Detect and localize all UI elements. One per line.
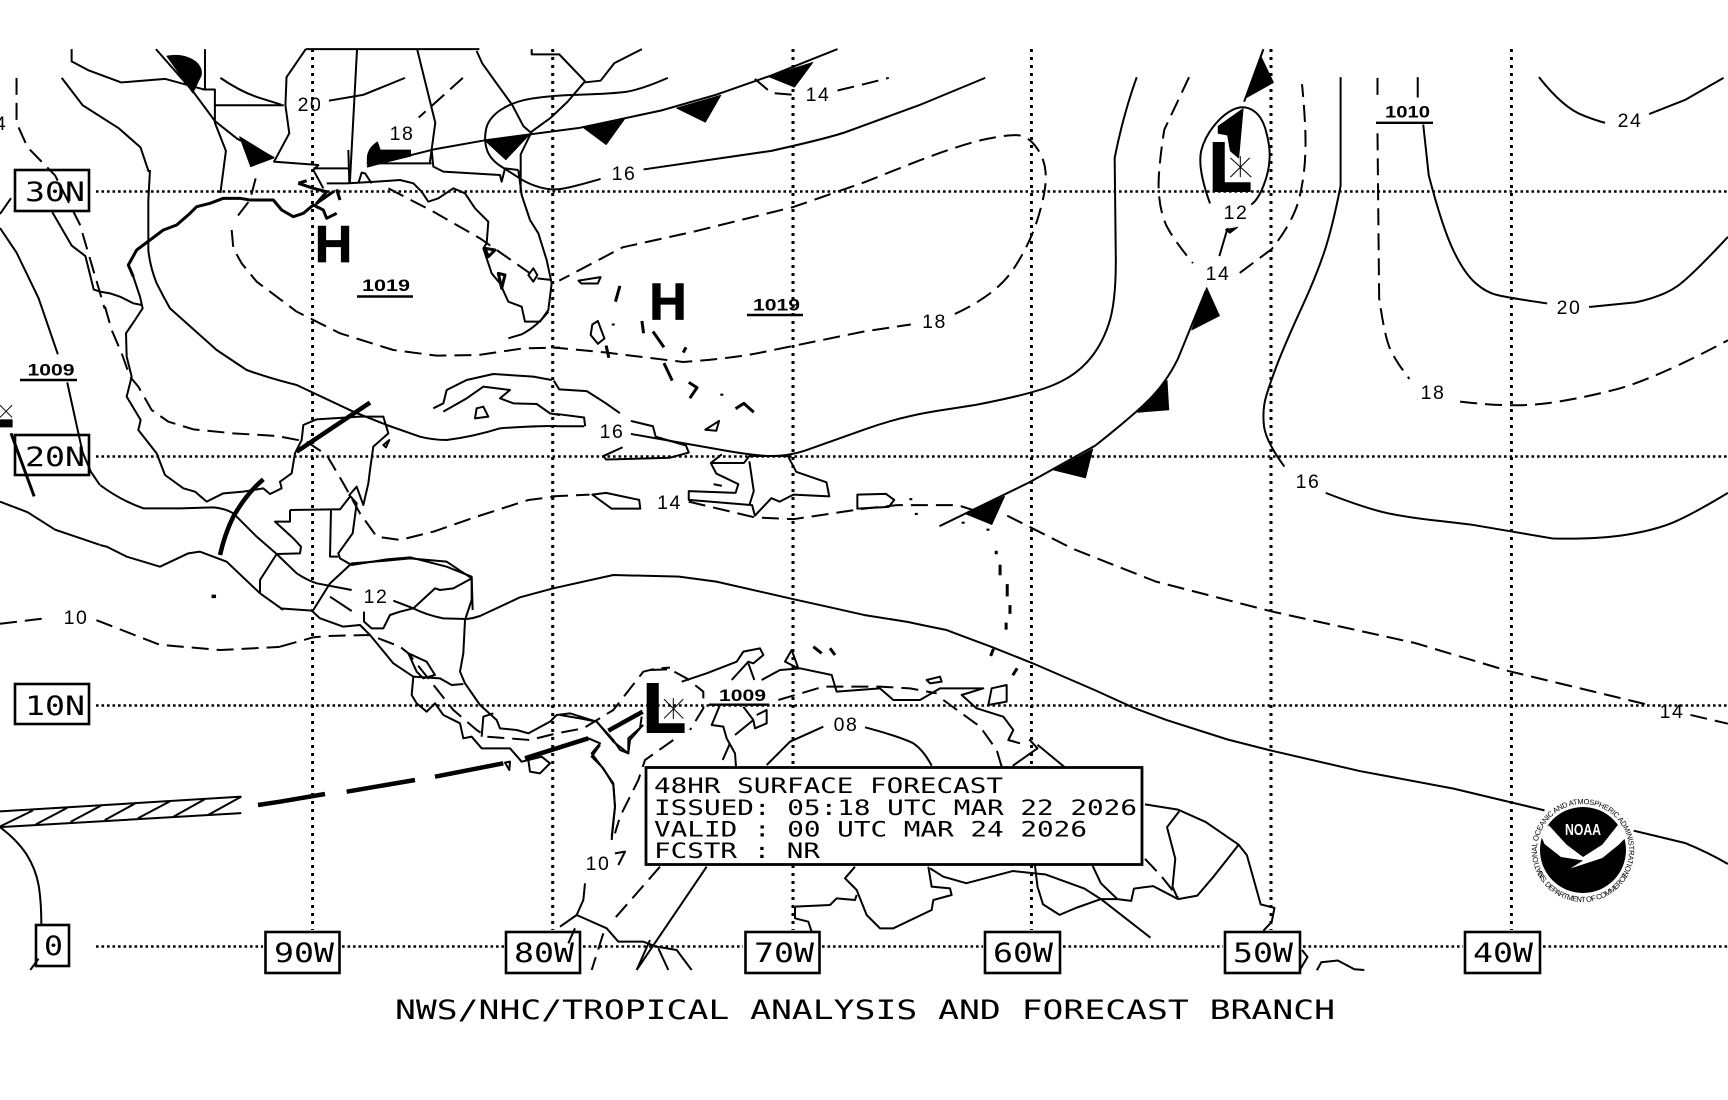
isobar contour labels: 20 [298, 94, 322, 116]
icon: NOAA logo: NOAA [1565, 822, 1601, 839]
pressure value 1019 Bahamas [747, 296, 803, 315]
isobar contour labels: 10 [586, 853, 610, 875]
isobar contour labels: 14 [1206, 263, 1230, 285]
longitude label 40W: 40W [1473, 938, 1534, 969]
isobar 08 contours, northern South America [637, 727, 967, 970]
pressure value 1019 Gulf: 1019 [362, 276, 410, 295]
pressure value 1009 Colombia [709, 686, 769, 705]
isobar contour labels [0, 84, 1684, 875]
coastlines and borders: northern South America [560, 647, 1020, 970]
pressure value 1009 Mexico: 1009 [28, 360, 74, 380]
tropical wave off southern Mexico [11, 433, 214, 598]
pressure value 1019 Bahamas: 1019 [753, 296, 800, 314]
low pressure symbol, Atlantic: L [1209, 128, 1252, 206]
latitude label 0: 0 [44, 931, 63, 962]
tropical wave over Yucatan and Mexico [220, 403, 370, 555]
longitude label 40W [1465, 932, 1540, 973]
isobar contour labels: 12 [364, 586, 388, 608]
latitude label 30N: 30N [25, 177, 85, 208]
pressure value 1009 Colombia: 1009 [719, 686, 766, 705]
high pressure symbol, Gulf of Mexico: H [315, 216, 352, 274]
longitude label 80W [506, 932, 580, 973]
longitude label 90W: 90W [274, 938, 335, 969]
icon: NOAA logo: U.S. DEPARTMENT OF COMMERCE [1538, 872, 1628, 902]
longitude label 90W [266, 932, 340, 973]
isobar contour labels: 18 [922, 311, 947, 333]
longitude label 60W: 60W [993, 938, 1054, 969]
latitude and longitude grid [96, 49, 1728, 946]
longitude label 70W: 70W [754, 938, 815, 969]
isobar contour labels: 08 [834, 714, 858, 736]
longitude label 60W [985, 932, 1060, 973]
isobar contour labels: 16 [1296, 471, 1320, 493]
coastlines and borders: Central America [280, 558, 642, 840]
low pressure centre crosses [0, 156, 1251, 719]
latitude label 30N [15, 170, 89, 211]
isobar contour traced across Central America [393, 575, 680, 619]
longitude label 80W: 80W [514, 938, 575, 969]
latitude label 10N: 10N [25, 691, 85, 722]
latitude label 20N [15, 435, 89, 475]
longitude label 50W [1225, 932, 1300, 973]
isobar contour labels: 16 [600, 421, 624, 443]
isobars: solid contours [0, 77, 1728, 938]
isobars: solid contours traced over Gulf and Central America [100, 170, 557, 590]
forecast information box: VALID : 00 UTC MAR 24 2026 [654, 818, 1087, 842]
latitude label 20N: 20N [25, 442, 85, 473]
footer credit line: NWS/NHC/TROPICAL ANALYSIS AND FORECAST BRANCH [395, 995, 1335, 1026]
forecast information box: ISSUED: 05:18 UTC MAR 22 2026 [654, 796, 1137, 820]
isobar contour labels: 24 [1618, 110, 1642, 132]
isobar contour labels: 18 [390, 123, 414, 145]
latitude label 0 [36, 925, 69, 966]
cold front across the Atlantic with barbs [939, 49, 1273, 526]
pressure value 1019 Gulf [357, 276, 413, 296]
isobar contour labels: 14 [657, 492, 682, 514]
forecast information box [646, 768, 1142, 864]
isobar 10 dashed contour, Central America [280, 635, 670, 740]
pressure value 1009 Mexico [20, 360, 77, 380]
isobar contour labels: 14 [1660, 701, 1684, 723]
longitude label 70W [746, 932, 820, 973]
longitude label 50W: 50W [1233, 938, 1294, 969]
dashed contours around the Colombian low [592, 669, 1002, 970]
pressure value 1010 Atlantic: 1010 [1385, 102, 1430, 122]
stationary front over the southeastern United States [156, 49, 838, 167]
monsoon trough: heavy dashes [258, 712, 643, 805]
coastlines and borders: northern Gulf states and Atlantic [0, 49, 1364, 971]
isobar contour labels: 20 [1557, 297, 1581, 319]
isobars: dashed contours traced over Gulf [105, 178, 560, 540]
isobar contour labels: 12 [1224, 202, 1248, 224]
isobar contour labels: 14 [806, 84, 830, 106]
isobar contour labels: 10 [64, 607, 88, 629]
monsoon trough: hatched band [0, 797, 241, 827]
isobars: dashed contours [0, 77, 1728, 897]
high pressure symbol, Bahamas: H [649, 274, 687, 332]
isobar contour labels: 18 [1421, 382, 1445, 404]
forecast information box: 48HR SURFACE FORECAST [654, 774, 1003, 798]
low pressure symbol, Colombia: L [643, 669, 686, 747]
icon: NOAA logo: NATIONAL OCEANIC AND ATMOSPHERIC ADMINISTRATION [1532, 798, 1634, 878]
latitude label 10N [15, 684, 89, 724]
pressure value 1010 Atlantic [1376, 102, 1433, 123]
forecast information box: FCSTR : NR [654, 839, 820, 863]
coastlines and borders: Gulf of Mexico, Florida, Yucatan, western Cuba [100, 150, 560, 610]
isobar contour labels: 16 [612, 163, 636, 185]
